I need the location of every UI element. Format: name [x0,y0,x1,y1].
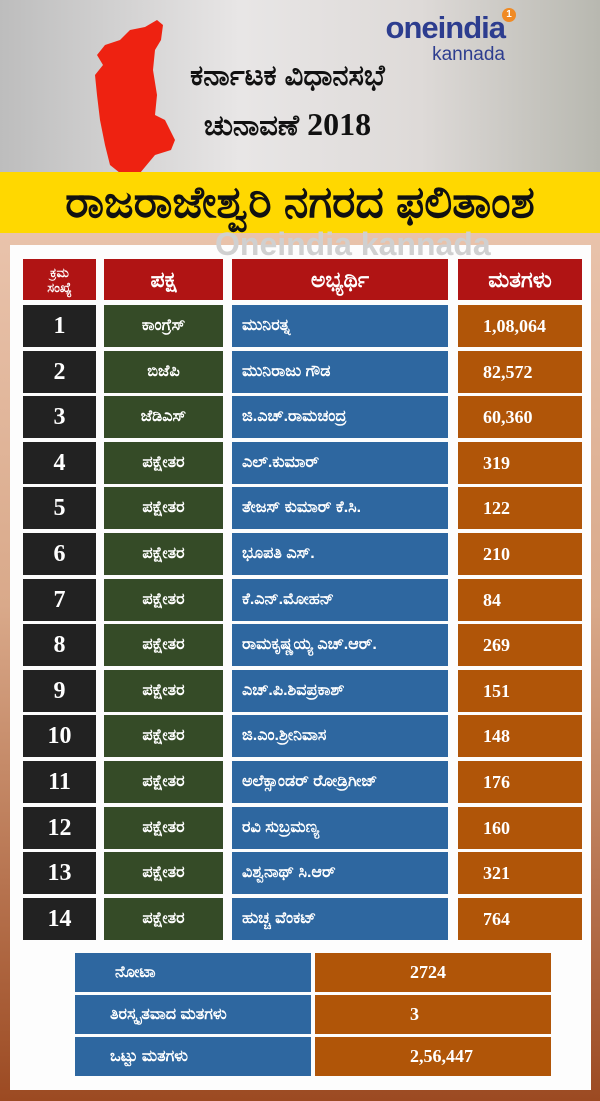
table: ತೇಜಸ್ ಕುಮಾರ್ ಕೆ.ಸಿ. [242,499,361,516]
table: ಪಕ್ಷೇತರ [142,773,185,790]
table: 148 [483,726,510,746]
yellow banner [0,172,600,233]
table: ಜೆಡಿಎಸ್ [141,408,186,425]
table: ಅಭ್ಯರ್ಥಿ [311,266,369,292]
table: ಜಿ.ಎಚ್.ರಾಮಚಂದ್ರ [242,408,346,425]
table: ಜಿ.ಎಂ.ಶ್ರೀನಿವಾಸ [242,727,326,744]
summary table: ನೋಟಾ [115,964,155,980]
table: ಪಕ್ಷೇತರ [142,682,185,699]
table: 3 [54,404,66,430]
logo: oneindia [386,10,505,45]
table: ಪಕ್ಷೇತರ [142,636,185,653]
table: 151 [483,680,510,700]
table: ವಿಶ್ವನಾಥ್ ಸಿ.ಆರ್ [242,864,336,881]
table: 4 [54,450,66,476]
table: 319 [483,452,510,472]
table: ಅಲೆಕ್ಸಾಂಡರ್ ರೋಡ್ರಿಗೀಜ್ [242,773,377,790]
summary table: 3 [410,1004,419,1024]
table: ಪಕ್ಷೇತರ [142,454,185,471]
title: ಚುನಾವಣೆ 2018 [204,106,371,142]
icon: karnataka map [95,20,175,172]
table: ಕೆ.ಎನ್.ಮೋಹನ್ [242,591,334,608]
table: ಭೂಪತಿ ಎಸ್. [242,545,315,562]
logo: kannada [432,44,505,65]
summary table: 2724 [410,962,446,982]
table: ರಾಮಕೃಷ್ಣಯ್ಯ ಎಚ್.ಆರ್. [242,636,377,653]
icon: logo badge [502,8,516,22]
table: 11 [48,768,71,794]
table: ಪಕ್ಷೇತರ [142,591,185,608]
table: 6 [54,540,66,566]
table: ಪಕ್ಷ [150,266,177,292]
table: ಕಾಂಗ್ರೆಸ್ [142,317,185,334]
white panel [10,245,591,1090]
table: 13 [48,860,72,886]
table: 5 [54,494,66,520]
table: 1 [54,312,66,338]
table: ಮುನಿರಾಜು ಗೌಡ [242,363,330,380]
table: ಸಂಖ್ಯೆ [47,280,72,294]
table: ಮುನಿರತ್ನ [242,317,290,334]
table: 84 [483,590,501,610]
table: 1,08,064 [483,316,546,336]
table: 10 [48,722,72,748]
table: 14 [48,906,72,932]
yellow banner: ರಾಜರಾಜೇಶ್ವರಿ ನಗರದ ಫಲಿತಾಂಶ [65,178,535,226]
logo [386,10,506,65]
table: ಪಕ್ಷೇತರ [142,727,185,744]
table: 82,572 [483,362,532,382]
table: 176 [483,772,510,792]
summary table: 2,56,447 [410,1046,473,1066]
table: ಎಚ್.ಪಿ.ಶಿವಪ್ರಕಾಶ್ [242,682,344,699]
table: 269 [483,634,510,654]
table: ಪಕ್ಷೇತರ [142,819,185,836]
table: ಪಕ್ಷೇತರ [142,499,185,516]
title: ಕರ್ನಾಟಕ ವಿಧಾನಸಭೆ [190,60,385,92]
table: 12 [48,814,72,840]
summary table: ಒಟ್ಟು ಮತಗಳು [110,1048,188,1064]
table: 8 [54,632,66,658]
table: ಪಕ್ಷೇತರ [142,910,185,927]
table: ರವಿ ಸುಬ್ರಮಣ್ಯ [242,819,319,836]
table: ಪಕ್ಷೇತರ [142,545,185,562]
table: 2 [54,358,66,384]
table: ಎಲ್.ಕುಮಾರ್ [242,454,319,471]
table: 210 [483,544,510,564]
table: ಹುಚ್ಚ ವೆಂಕಟ್ [242,910,316,927]
header background [0,0,600,172]
summary table: ತಿರಸ್ಕೃತವಾದ ಮತಗಳು [110,1006,227,1022]
table: 7 [54,586,66,612]
table: 122 [483,498,510,518]
watermark: Oneindia kannada [215,226,491,262]
icon: logo badge: 1 [506,9,512,20]
table: ಪಕ್ಷೇತರ [142,864,185,881]
summary table [75,953,551,1076]
table: ಬಿಜೆಪಿ [147,363,180,380]
table: 321 [483,862,510,882]
table: 9 [54,678,66,704]
table: 60,360 [483,406,532,426]
table: 160 [483,818,510,838]
table: ಮತಗಳು [488,266,552,292]
table: ಕ್ರಮ [50,264,69,280]
table: 764 [483,908,510,928]
title [190,60,386,142]
